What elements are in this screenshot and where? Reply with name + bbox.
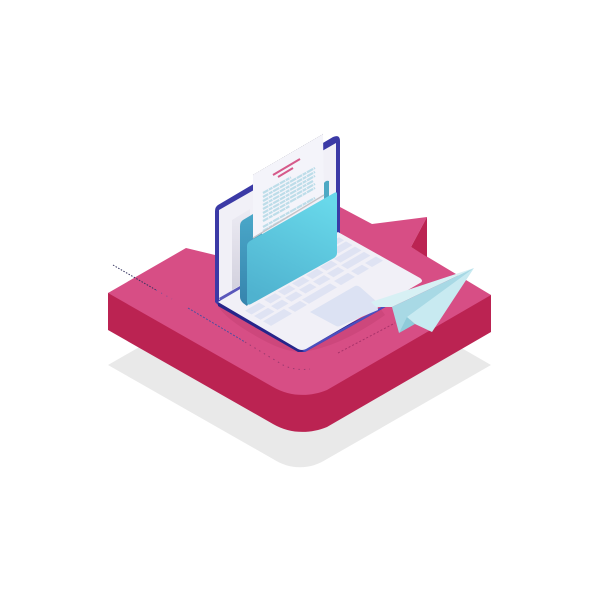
isometric laptop illustration [108, 134, 491, 468]
paper plane [371, 268, 474, 333]
dotted path [113, 265, 395, 370]
document text [263, 168, 315, 231]
folder tab [324, 181, 329, 200]
grey sheet [232, 209, 250, 290]
trackpad [310, 286, 378, 326]
document [253, 134, 324, 238]
document heading [273, 159, 300, 177]
document top edge [253, 134, 323, 175]
arrow fold [411, 217, 427, 257]
folder with document [232, 134, 337, 306]
laptop shadow [218, 306, 385, 352]
platform top surface [108, 207, 491, 395]
ground shadow [108, 255, 491, 467]
platform side [108, 250, 491, 432]
laptop [215, 136, 422, 352]
laptop screen [215, 136, 340, 305]
folder back [240, 212, 262, 306]
laptop base [218, 232, 422, 352]
document folder-edge shadow [253, 195, 324, 238]
keyboard [229, 236, 383, 326]
folder front [247, 192, 337, 305]
